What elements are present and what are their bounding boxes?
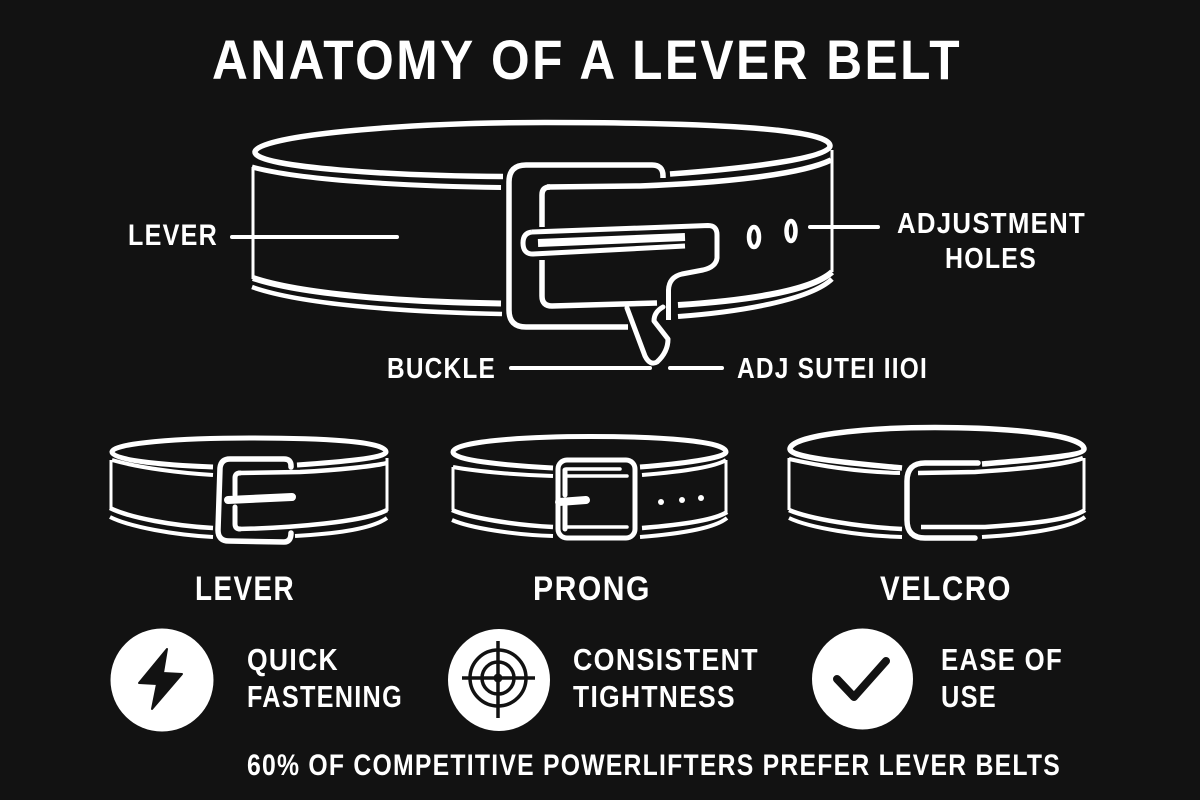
- benefit: quick fastening: FASTENING: [247, 679, 403, 714]
- velcro strap: [907, 463, 978, 538]
- buckle frame: [509, 165, 663, 327]
- lever belt illustration: [110, 438, 387, 542]
- callout: lever: LEVER: [128, 219, 218, 252]
- callout: adjustment holes: HOLES: [945, 243, 1037, 275]
- benefit: ease of use: USE: [941, 679, 997, 714]
- inner strap: [542, 187, 657, 306]
- icon: lightning bolt: [110, 628, 214, 732]
- adjustment holes: [749, 227, 759, 247]
- main lever belt diagram: [252, 122, 832, 363]
- callout: adjustment holes: [810, 208, 1086, 275]
- label: prong: PRONG: [533, 570, 651, 608]
- benefit: consistent tightness: [573, 642, 759, 714]
- velcro belt illustration: [789, 428, 1085, 538]
- prong: [559, 500, 586, 502]
- benefit: ease of use: EASE OF: [941, 642, 1063, 677]
- holes: [658, 499, 664, 505]
- label: lever: LEVER: [195, 570, 295, 608]
- lever tip: [627, 307, 668, 363]
- icon: check mark: [812, 628, 913, 730]
- benefit: consistent tightness: TIGHTNESS: [573, 679, 736, 714]
- benefit: quick fastening: [247, 642, 403, 714]
- benefit: consistent tightness: CONSISTENT: [573, 642, 759, 677]
- prong belt illustration: [452, 436, 727, 538]
- benefit: quick fastening: QUICK: [247, 642, 339, 677]
- buckle: [218, 459, 291, 542]
- icon: target: [448, 629, 550, 731]
- lever arm: [523, 226, 717, 320]
- callout: buckle: BUCKLE: [387, 353, 496, 385]
- callout: garbled adjustment label: ADJ SUTEI IIOI: [737, 353, 928, 385]
- prong: [228, 497, 292, 500]
- buckle: [558, 460, 635, 538]
- title: ANATOMY OF A LEVER BELT: [212, 28, 962, 91]
- benefit: ease of use: [941, 642, 1063, 714]
- label: velcro: VELCRO: [880, 570, 1012, 608]
- callout: adjustment holes: ADJUSTMENT: [897, 208, 1086, 240]
